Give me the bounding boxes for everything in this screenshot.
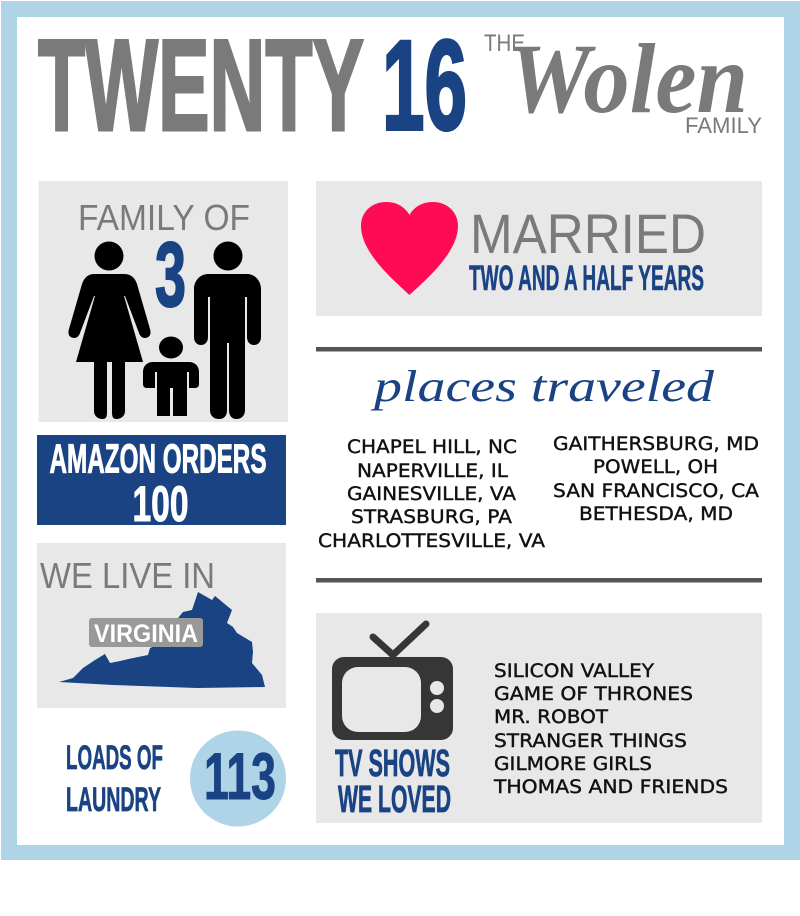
list: tv shows: MR. ROBOT [494,707,609,728]
heading: places traveled: places traveled [370,362,715,411]
list: places column two: GAITHERSBURG, MD [553,434,759,455]
divider [316,347,762,352]
label: THE: THE [484,30,525,57]
list: tv shows: SILICON VALLEY [494,661,655,682]
label: AMAZON ORDERS: AMAZON ORDERS [50,436,266,482]
list: places column two [553,434,759,525]
panel: amazon orders [37,435,286,532]
panel: we live in [37,543,286,708]
circle with number 113: 113 [204,739,276,813]
label: LAUNDRY: LAUNDRY [66,781,161,819]
title [38,12,467,158]
list: places column two: BETHESDA, MD [579,504,733,525]
panel: tv shows [316,613,762,823]
list: tv shows [493,661,728,798]
icon: woman [68,242,151,419]
divider [316,578,762,582]
list: tv shows: GAME OF THRONES [494,684,693,705]
icon: television [332,624,453,740]
list: places column one [318,437,545,552]
script name: Wolen: Wolen [508,23,748,134]
panel: family of 3 [38,181,288,422]
title word: TWENTY: TWENTY [38,12,364,158]
list: places column two: POWELL, OH [593,457,718,478]
panel: married [316,181,762,316]
circle with number 113 [190,730,286,826]
list: places column one: NAPERVILLE, IL [357,461,509,482]
list: tv shows: THOMAS AND FRIENDS [493,777,728,798]
heading: WE LIVE IN: WE LIVE IN [40,555,215,596]
list: tv shows: STRANGER THINGS [494,731,687,752]
list: places column two: SAN FRANCISCO, CA [553,481,759,502]
list: places column one: GAINESVILLE, VA [347,484,516,505]
list: places column one: CHAPEL HILL, NC [347,437,517,458]
number: 3: 3 [155,224,186,326]
map: Virginia [59,592,265,688]
list: tv shows: GILMORE GIRLS [494,754,652,775]
list: places column one: STRASBURG, PA [351,507,512,528]
icon: child [143,336,199,416]
label: LOADS OF: LOADS OF [66,739,163,777]
stat: loads of laundry [66,730,286,826]
label: WE LOVED: WE LOVED [338,779,451,821]
label: FAMILY: FAMILY [685,113,762,138]
list: places column one: CHARLOTTESVILLE, VA [318,531,545,552]
family name lockup [484,23,762,138]
icon: man [194,242,261,419]
heading: FAMILY OF: FAMILY OF [78,197,250,238]
label: TV SHOWS: TV SHOWS [335,743,450,785]
heading: MARRIED: MARRIED [470,202,706,265]
map label: VIRGINIA: VIRGINIA [94,620,198,648]
number: 100: 100 [132,476,188,532]
title number: 16: 16 [382,14,467,158]
icon: heart [361,202,458,295]
